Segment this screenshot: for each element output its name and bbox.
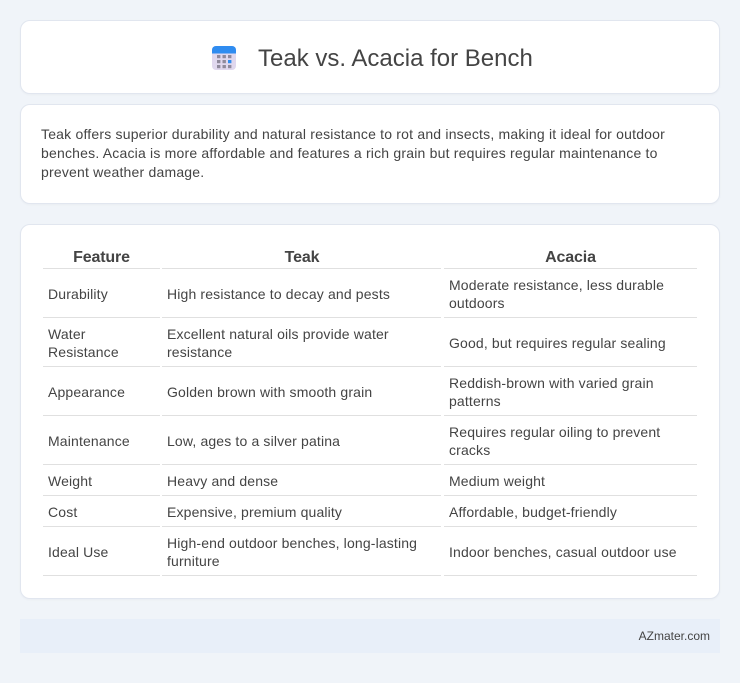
row: Maintenance: cracks	[449, 442, 490, 458]
row: Maintenance	[48, 424, 660, 458]
row: Cost: Expensive, premium quality	[167, 504, 342, 520]
row: Durability: High resistance to decay and pests	[167, 286, 390, 302]
row: Durability: Durability	[48, 286, 108, 302]
icon: calendar	[212, 46, 236, 70]
row: Ideal Use	[48, 535, 677, 569]
row: Cost	[48, 504, 617, 520]
row: Weight: Heavy and dense	[167, 473, 278, 489]
footer bar	[20, 619, 720, 653]
row: Ideal Use: Ideal Use	[48, 544, 108, 560]
panel: summary	[20, 104, 720, 204]
row: Appearance: patterns	[449, 393, 501, 409]
row: Water Resistance: Good, but requires regular sealing	[449, 335, 666, 351]
row: Maintenance: Maintenance	[48, 433, 130, 449]
row: Ideal Use: Indoor benches, casual outdoor use	[449, 544, 677, 560]
row: Water Resistance: Resistance	[48, 344, 119, 360]
row: Maintenance: Low, ages to a silver patina	[167, 433, 340, 449]
row: Durability	[48, 277, 664, 311]
text block: summary: benches. Acacia is more affordable and features a rich grain but requires regular maintenance to	[41, 145, 658, 161]
panel: comparison table	[20, 224, 720, 599]
footer text: AZmater.com	[639, 629, 710, 643]
row: Weight: Weight	[48, 473, 92, 489]
row: Appearance	[48, 375, 654, 409]
row: Water Resistance: Excellent natural oils provide water	[167, 326, 389, 342]
row: Water Resistance: resistance	[167, 344, 232, 360]
row: Cost: Cost	[48, 504, 77, 520]
header: Feature: Feature	[73, 249, 130, 266]
row: Ideal Use: High-end outdoor benches, long-lasting	[167, 535, 417, 551]
row: Weight: Medium weight	[449, 473, 545, 489]
title: Teak vs. Acacia for Bench	[258, 45, 533, 72]
row: Water Resistance: Water	[48, 326, 86, 342]
row: Durability: outdoors	[449, 295, 505, 311]
text block: summary: Teak offers superior durability and natural resistance to rot and insects, making it ideal for outdoor	[41, 126, 665, 142]
header: Teak: Teak	[285, 249, 319, 266]
text block: summary: prevent weather damage.	[41, 164, 204, 180]
row: Cost: Affordable, budget-friendly	[449, 504, 617, 520]
row: Appearance: Golden brown with smooth grain	[167, 384, 372, 400]
row: Weight	[48, 473, 545, 489]
text block: summary	[41, 126, 665, 180]
row: Appearance: Reddish-brown with varied grain	[449, 375, 654, 391]
header: Acacia: Acacia	[545, 249, 596, 266]
row: Water Resistance	[48, 326, 666, 360]
row: Ideal Use: furniture	[167, 553, 220, 569]
row: Maintenance: Requires regular oiling to prevent	[449, 424, 660, 440]
panel: title card	[20, 20, 720, 94]
row: Appearance: Appearance	[48, 384, 125, 400]
row: Durability: Moderate resistance, less durable	[449, 277, 664, 293]
